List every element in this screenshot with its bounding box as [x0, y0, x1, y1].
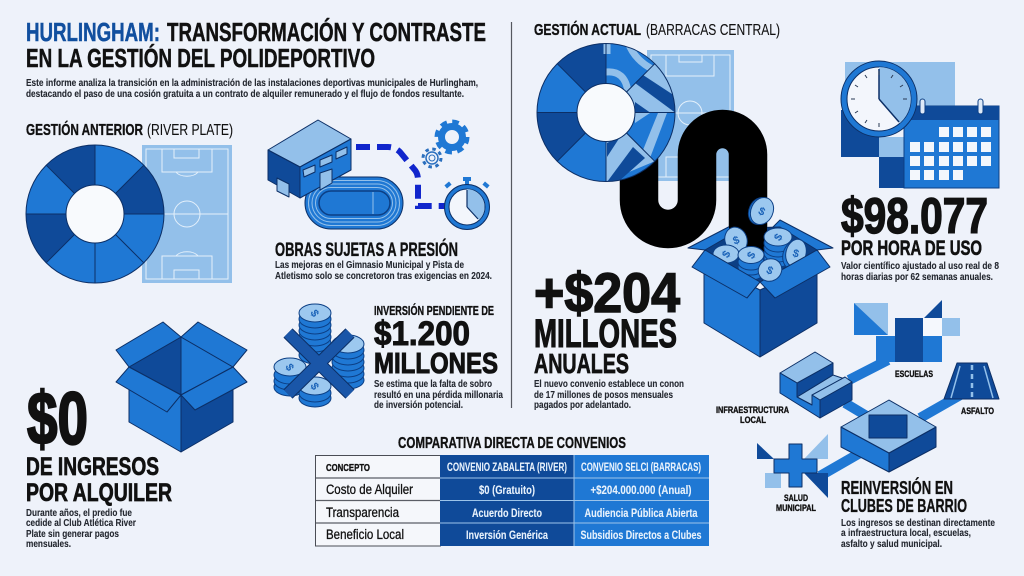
arrow: dashed path to stopwatch: [356, 147, 446, 206]
stat: $98.077: $98.077: [841, 188, 988, 244]
text: reinversión: asfalto y salud municipal.: [841, 539, 942, 550]
heading: gestión anterior: GESTIÓN ANTERIOR: [26, 121, 143, 139]
text: nuevo convenio: El nuevo convenio establece un conon: [534, 379, 684, 390]
text: obras: Las mejoras en el Gimnasio Municipal y Pista de: [275, 260, 464, 271]
heading: reinversión: [841, 477, 967, 516]
icon: coin falling: [744, 194, 778, 228]
comparison table: Inversión Genérica: [466, 530, 548, 542]
comparison table: Subsidios Directos a Clubes: [580, 530, 702, 542]
comparison table: Beneficio Local: [326, 527, 404, 542]
comparison table: Audiencia Pública Abierta: [584, 508, 698, 520]
icon: asfalto road: [944, 363, 999, 399]
text: de ingresos por alquiler: Durante años, el predio fue: [26, 508, 132, 519]
text: reinversión: a infraestructura local, escuelas,: [841, 528, 971, 539]
icon: escuelas: [854, 300, 960, 362]
heading: gestión actual: [534, 21, 780, 39]
heading: gestión actual: GESTIÓN ACTUAL: [534, 21, 641, 39]
icon: coins in box: $: [791, 247, 800, 261]
text: obras: Atletismo solo se concretoron tras exigencias en 2024.: [275, 271, 492, 282]
donut right with pattern: [537, 42, 690, 182]
icon: clock and calendar: [841, 61, 999, 188]
icon: small gear: [423, 149, 441, 167]
label: salud municipal: MUNICIPAL: [776, 503, 816, 514]
comparison table: [316, 455, 709, 546]
text: reinversión: Los ingresos se destinan directamente: [841, 518, 995, 529]
text: valor científico: [841, 261, 999, 283]
heading: reinversión: REINVERSIÓN EN: [841, 477, 953, 498]
text: inversión pendiente: [374, 303, 503, 411]
icon: crossed coins: [274, 304, 364, 407]
stat: +$204 millones: [534, 261, 680, 379]
comparison table: $0 (Gratuito): [479, 485, 535, 497]
icon: empty box: [116, 322, 247, 452]
label: infraestructura local: INFRAESTRUCTURA: [716, 405, 789, 416]
text: inversión pendiente: $1.200: [374, 315, 470, 353]
text: de ingresos por alquiler: [26, 453, 172, 550]
text: nuevo convenio: de 17 millones de posos mensuales: [534, 390, 673, 401]
coin on box rim: $: [764, 264, 775, 278]
comparison table: Acuerdo Directo: [472, 508, 542, 520]
intro text: [26, 78, 478, 100]
title: [26, 17, 486, 73]
intro text: Este informe analiza la transición en la administración de las instalaciones deportivas municipales de Hurlingham,: [26, 78, 478, 89]
icon: large gear: [437, 122, 467, 152]
icon: infraestructura: [780, 352, 852, 418]
cross: [288, 333, 350, 394]
comparison table: CONVENIO SELCI (BARRACAS): [581, 462, 701, 474]
title: EN LA GESTIÓN DEL POLIDEPORTIVO: [26, 43, 375, 73]
text: valor científico: horas diarias por 62 semanas anuales.: [841, 272, 993, 283]
heading: comparativa: COMPARATIVA DIRECTA DE CONVENIOS: [398, 435, 626, 452]
text: nuevo convenio: [534, 379, 684, 411]
text: de ingresos por alquiler: Plate sin generar pagos: [26, 529, 119, 540]
text: inversión pendiente: INVERSIÓN PENDIENTE DE: [374, 303, 494, 318]
clock: [841, 61, 917, 137]
icon: box back flaps: [688, 220, 833, 282]
text: inversión pendiente: resultó en una pérdida millonaria: [374, 390, 503, 401]
icon: track: [305, 177, 403, 229]
text: inversión pendiente: de inversión potencial.: [374, 400, 463, 411]
icon: coins in box: $: [731, 234, 741, 248]
label: salud municipal: SALUD: [784, 493, 808, 504]
icon: coins in box: $: [772, 232, 786, 243]
text: nuevo convenio: pagados por adelantado.: [534, 400, 631, 411]
football field left: [142, 145, 232, 283]
icon: coins in box: [713, 224, 809, 280]
coin stack: center: $: [307, 308, 321, 319]
icon: stopwatch: [444, 177, 490, 230]
heading: gestión actual: (BARRACAS CENTRAL): [646, 22, 780, 39]
stat: +$204 millones: +$204: [534, 261, 680, 324]
text: obras: [275, 260, 492, 282]
icon: coins in box: $: [720, 249, 734, 260]
title: HURLINGHAM:: [26, 19, 160, 47]
heading: reinversión: CLUBES DE BARRIO: [841, 495, 967, 516]
comparison table: +$204.000.000 (Anual): [590, 485, 692, 497]
text: de ingresos por alquiler: DE INGRESOS: [26, 453, 159, 481]
stat: $98.077: [841, 188, 988, 260]
intro text: destacando el paso de una cosión gratuita a un contrato de alquiler remunerado y el flujo de fondos resultante.: [26, 89, 464, 100]
stat: +$204 millones: ANUALES: [534, 348, 629, 379]
label: escuelas: ESCUELAS: [895, 369, 933, 380]
heading: gestión anterior: (RIVER PLATE): [147, 122, 233, 139]
label: infraestructura local: [716, 405, 789, 426]
label: salud municipal: [776, 493, 816, 514]
donut left: [26, 145, 164, 283]
comparison table: CONVENIO ZABALETA (RIVER): [447, 462, 567, 474]
text: reinversión: [841, 518, 995, 550]
coin stack: left: $: [282, 362, 296, 373]
icon: central hub: [841, 400, 936, 472]
money flow ribbon: [639, 129, 748, 252]
network connectors: [820, 360, 962, 476]
title: TRANSFORMACIÓN Y CONTRASTE: [167, 17, 486, 47]
label: infraestructura local: LOCAL: [740, 415, 766, 426]
coin stack: bottom: $: [307, 381, 321, 392]
icon: salud municipal: [757, 434, 828, 498]
football field right: [647, 50, 734, 181]
backdrop blocks: [841, 62, 955, 188]
icon: coins in box: $: [745, 250, 759, 261]
text: de ingresos por alquiler: mensuales.: [26, 539, 71, 550]
comparison table: Costo de Alquiler: [326, 482, 413, 497]
text: inversión pendiente: Se estima que la falta de sobro: [374, 379, 492, 390]
stat: $0: $0: [27, 377, 88, 460]
heading: obras: OBRAS SUJETAS A PRESIÓN: [275, 237, 458, 261]
text: de ingresos por alquiler: cedide al Club Atlética River: [26, 518, 136, 529]
icon: gymnasium building: [268, 120, 351, 198]
text: inversión pendiente: MILLONES: [374, 348, 498, 380]
stat: +$204 millones: MILLONES: [534, 312, 677, 356]
text: de ingresos por alquiler: POR ALQUILER: [26, 479, 172, 507]
icon: coin falling: $: [756, 205, 767, 219]
coin on box rim: [754, 254, 786, 286]
calendar: [904, 99, 999, 188]
coin stack: right: [332, 335, 364, 389]
comparison table: Transparencia: [326, 505, 399, 520]
money flow ribbon end: [729, 200, 767, 252]
comparison table: CONCEPTO: [326, 462, 370, 474]
icon: open box with coins: [692, 250, 830, 357]
label: asfalto: ASFALTO: [961, 406, 994, 417]
